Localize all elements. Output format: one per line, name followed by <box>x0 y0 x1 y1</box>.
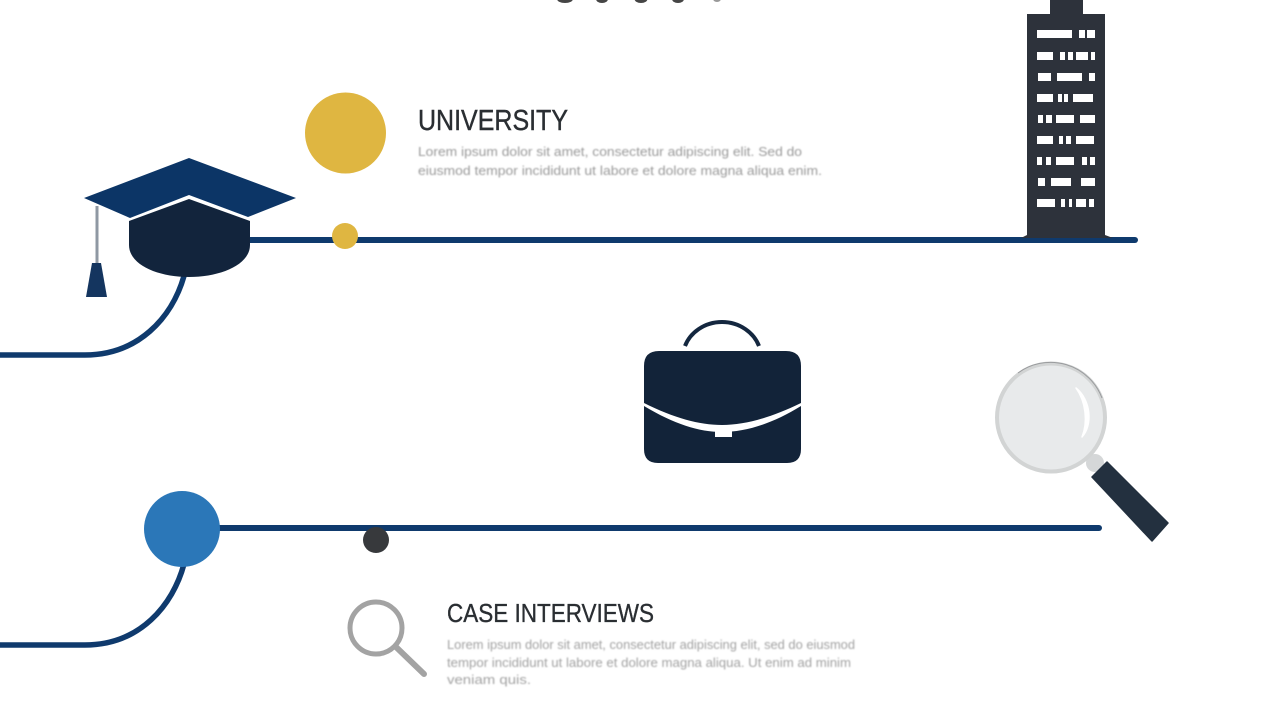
case interviews timeline connector <box>0 528 1099 645</box>
icon: briefcase <box>644 322 801 463</box>
gold timeline marker <box>332 223 358 249</box>
icon: small magnifying glass <box>350 602 424 674</box>
heading: university: UNIVERSITY <box>418 105 568 137</box>
icon: large magnifying glass <box>997 362 1168 541</box>
text block: university description: eiusmod tempor incididunt ut labore et dolore magna aliqua enim. <box>418 164 822 178</box>
dark timeline marker <box>363 527 389 553</box>
icon: large gold circle <box>305 92 386 174</box>
heading: case interviews: CASE INTERVIEWS <box>447 598 654 628</box>
text block: university description <box>418 145 822 178</box>
text block: case interviews description: tempor incididunt ut labore et dolore magna aliqua. Ut enim ad minim <box>447 656 851 670</box>
text block: case interviews description <box>447 638 855 687</box>
icon: office tower <box>1021 0 1113 238</box>
text block: case interviews description: Lorem ipsum dolor sit amet, consectetur adipiscing elit, sed do eiusmod <box>447 638 855 652</box>
cropped row of dots at top edge <box>557 0 721 3</box>
university timeline connector <box>0 240 1135 355</box>
text block: university description: Lorem ipsum dolor sit amet, consectetur adipiscing elit. Sed do <box>418 145 802 159</box>
icon: graduation cap <box>84 158 296 297</box>
blue timeline node <box>144 491 220 567</box>
text block: case interviews description: veniam quis. <box>447 673 531 687</box>
